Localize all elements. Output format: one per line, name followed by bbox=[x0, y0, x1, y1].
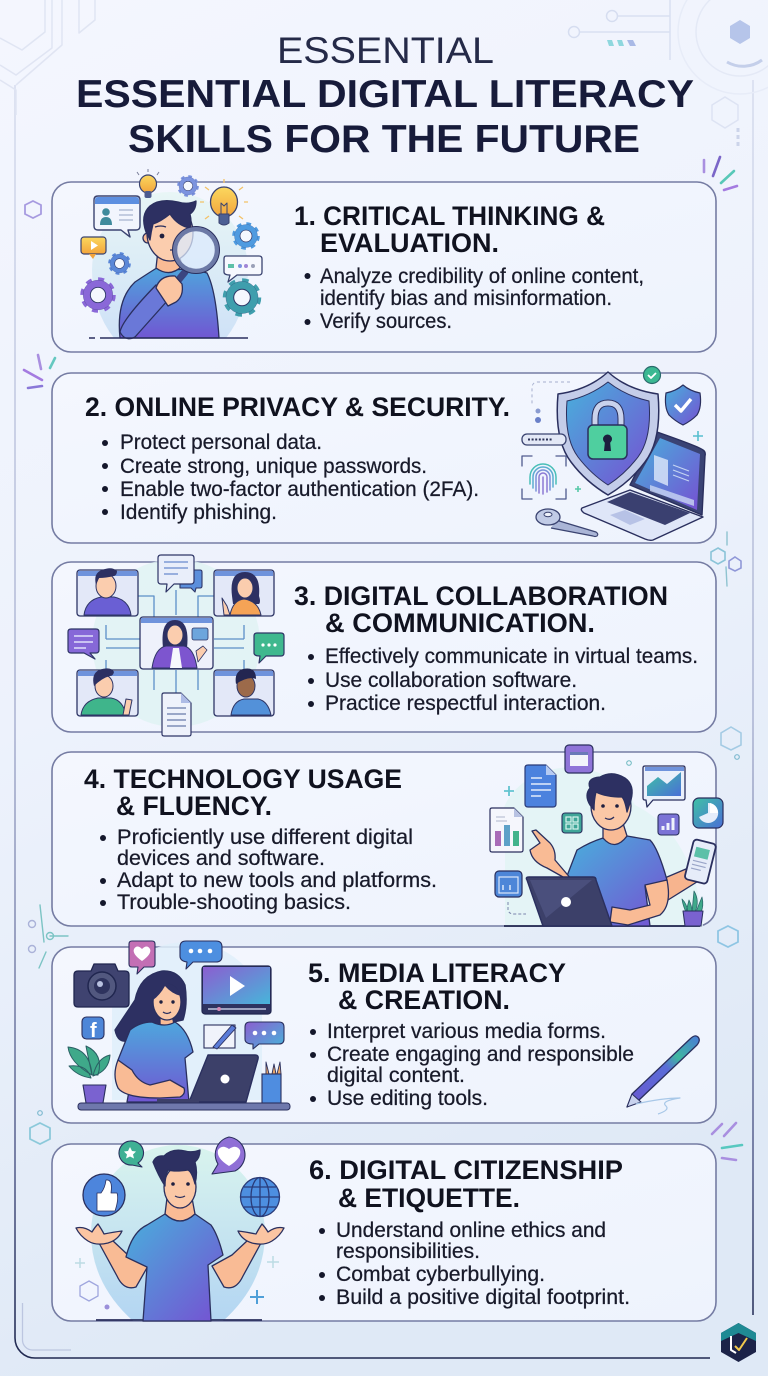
icon: heart bubble bbox=[212, 1137, 245, 1174]
panel 1 bullets: Analyze credibility of online content, bbox=[320, 265, 644, 288]
panel 5 bullets: Use editing tools. bbox=[327, 1087, 488, 1110]
video tile: man bottom right bbox=[214, 668, 274, 716]
panel 3 bullets: Use collaboration software. bbox=[325, 669, 577, 692]
panel 4 heading: & FLUENCY. bbox=[116, 791, 272, 821]
panel 4 bullets: Trouble-shooting basics. bbox=[117, 891, 351, 914]
woman bbox=[115, 971, 193, 1102]
corner logo badge bbox=[721, 1323, 756, 1362]
right arm and open hand bbox=[212, 1224, 284, 1288]
top-left circuit decoration bbox=[0, 0, 95, 115]
panel 1 heading bbox=[294, 201, 605, 258]
icon: globe bbox=[240, 1177, 280, 1217]
icon: pen bbox=[627, 1036, 699, 1114]
panel 2 bullets: Enable two-factor authentication (2FA). bbox=[120, 478, 479, 501]
panel 4: technology usage bbox=[52, 745, 723, 926]
laptop bbox=[526, 877, 612, 926]
pencil cup bbox=[262, 1062, 281, 1103]
panel 6 bullets: Build a positive digital footprint. bbox=[336, 1286, 630, 1309]
panel 5 bullets: Create engaging and responsible bbox=[327, 1043, 634, 1066]
man bbox=[530, 774, 700, 926]
icon: thumbs up bbox=[83, 1174, 125, 1216]
plant bbox=[682, 891, 703, 926]
illustration: person with magnifier bbox=[81, 169, 262, 339]
panel 3 bullets: Practice respectful interaction. bbox=[325, 692, 606, 715]
panel 2 bullets: Identify phishing. bbox=[120, 501, 277, 524]
panel 2 card bbox=[52, 373, 716, 543]
panel 3: digital collaboration bbox=[52, 555, 716, 736]
panel 4 bullets bbox=[100, 826, 437, 914]
panel 3 heading bbox=[294, 581, 668, 638]
panel 6 bullets: Understand online ethics and bbox=[336, 1219, 606, 1242]
icon: small bulb bbox=[137, 169, 159, 198]
illustration: video call network bbox=[68, 555, 284, 736]
icon: star bubble bbox=[119, 1141, 144, 1167]
icon: document bbox=[162, 693, 191, 736]
illustration: shield, lock and laptop bbox=[522, 366, 705, 540]
panel 2 bullets: Create strong, unique passwords. bbox=[120, 455, 427, 478]
title line 1: ESSENTIAL bbox=[277, 29, 494, 71]
panel 6 heading bbox=[309, 1155, 623, 1213]
panel 4 card bbox=[52, 752, 716, 926]
man bbox=[76, 1150, 284, 1321]
check badge bbox=[644, 366, 660, 384]
icon: pen note bbox=[204, 1025, 236, 1049]
icon: purple chat bubble bbox=[68, 629, 99, 659]
inner corner accent bbox=[22, 1303, 71, 1350]
panel 3 card bbox=[52, 562, 716, 732]
illustration: man with laptop and floating apps bbox=[490, 745, 723, 926]
fingerprint bbox=[522, 456, 566, 499]
panel 6 heading: & ETIQUETTE. bbox=[338, 1183, 520, 1213]
panel 4 bullets: devices and software. bbox=[117, 847, 325, 870]
icon: small blue gear bbox=[110, 254, 129, 273]
small shield bbox=[665, 385, 701, 425]
icon: facebook tile bbox=[82, 1017, 104, 1042]
video tile: man bottom left bbox=[77, 668, 138, 716]
panel 2 bullets bbox=[102, 431, 479, 524]
panel 5: media literacy bbox=[52, 941, 716, 1123]
icon: green chat bubble bbox=[254, 633, 284, 663]
icon: blue gear bbox=[234, 224, 258, 248]
plant bbox=[68, 1046, 110, 1103]
video tile: man top left bbox=[77, 568, 138, 616]
panel 1 heading: 1. CRITICAL THINKING & bbox=[294, 201, 605, 231]
panel 6 bullets: responsibilities. bbox=[336, 1240, 480, 1263]
panel 4 heading: 4. TECHNOLOGY USAGE bbox=[84, 764, 402, 794]
icon: dots bubble bbox=[180, 941, 222, 969]
left arm and open hand bbox=[76, 1224, 148, 1288]
icon: top chat bubble bbox=[158, 555, 202, 592]
laptop bbox=[581, 432, 705, 540]
title bbox=[76, 29, 694, 161]
icon: purple tile bbox=[565, 745, 593, 773]
panel 1 bullets bbox=[304, 265, 644, 333]
icon: chart document bbox=[490, 808, 523, 852]
panel 6 heading: 6. DIGITAL CITIZENSHIP bbox=[309, 1155, 623, 1185]
panel 1 bullets: Verify sources. bbox=[320, 310, 452, 333]
panel 5 card bbox=[52, 947, 716, 1123]
panel 1 card bbox=[52, 182, 716, 352]
panel 5 bullets: Interpret various media forms. bbox=[327, 1020, 606, 1043]
panel 6: digital citizenship bbox=[52, 1137, 716, 1321]
big shield bbox=[557, 372, 659, 495]
panel 2: online privacy and security bbox=[52, 366, 716, 543]
phone bbox=[684, 839, 716, 884]
panel 4 bullets: Adapt to new tools and platforms. bbox=[117, 869, 437, 892]
panel 3 bullets: Effectively communicate in virtual teams. bbox=[325, 645, 698, 668]
icon: calendar tile bbox=[495, 871, 522, 897]
icon: facebook tile: f bbox=[90, 1020, 97, 1042]
title line 3: SKILLS FOR THE FUTURE bbox=[128, 118, 640, 161]
icon: teal gear bbox=[225, 281, 259, 314]
icon: play bubble bbox=[81, 237, 106, 259]
video tile: woman presenter bbox=[140, 617, 213, 669]
panel 4 heading bbox=[84, 764, 402, 821]
top-right circuit decoration bbox=[568, 0, 768, 146]
panel 5 heading: 5. MEDIA LITERACY bbox=[308, 958, 566, 988]
panel 5 heading bbox=[308, 958, 566, 1015]
small decor: sparks and hexagons bbox=[24, 157, 742, 1160]
icon: blue document bbox=[525, 765, 556, 807]
panel 3 bullets bbox=[308, 645, 698, 715]
icon: top gear bbox=[179, 177, 197, 195]
panel 3 heading: 3. DIGITAL COLLABORATION bbox=[294, 581, 668, 611]
panel 1: critical thinking bbox=[52, 169, 716, 352]
panel 2 bullets: Protect personal data. bbox=[120, 431, 322, 454]
panel 2 heading: 2. ONLINE PRIVACY & SECURITY. bbox=[85, 392, 510, 422]
illustration: man with social icons bbox=[75, 1137, 284, 1321]
icon: small bar tile bbox=[658, 814, 679, 835]
panel 3 heading: & COMMUNICATION. bbox=[325, 608, 595, 638]
icon: profile window bbox=[94, 196, 140, 237]
icon: chart window bbox=[643, 766, 685, 807]
illustration: woman creating media bbox=[68, 941, 290, 1110]
panel 5 bullets bbox=[310, 1020, 634, 1110]
panel 5 heading: & CREATION. bbox=[338, 985, 510, 1015]
panel 6 bullets: Combat cyberbullying. bbox=[336, 1263, 545, 1286]
panel 1 bullets: identify bias and misinformation. bbox=[320, 287, 612, 310]
icon: chat bubble bbox=[224, 256, 262, 282]
panel 4 bullets: Proficiently use different digital bbox=[117, 826, 413, 849]
password pill bbox=[522, 434, 566, 445]
panel 6 bullets bbox=[319, 1219, 630, 1309]
title line 2: ESSENTIAL DIGITAL LITERACY bbox=[76, 73, 694, 116]
icon: camera bbox=[74, 964, 129, 1007]
person bbox=[119, 201, 220, 339]
video tile: woman top right bbox=[214, 570, 274, 616]
panel 6 card bbox=[52, 1144, 716, 1321]
icon: pie tile bbox=[693, 798, 723, 828]
icon: purple gear bbox=[83, 280, 113, 310]
icon: video player bbox=[202, 966, 271, 1014]
panel 5 bullets: digital content. bbox=[327, 1064, 465, 1087]
panel 1 heading: EVALUATION. bbox=[320, 228, 499, 258]
desk bbox=[78, 1103, 290, 1110]
key bbox=[536, 509, 598, 536]
icon: purple dots bubble bbox=[245, 1022, 284, 1049]
icon: qr tile bbox=[562, 813, 582, 833]
icon: heart bubble bbox=[129, 941, 155, 974]
laptop bbox=[157, 1055, 258, 1103]
icon: large bulb bbox=[200, 179, 248, 225]
